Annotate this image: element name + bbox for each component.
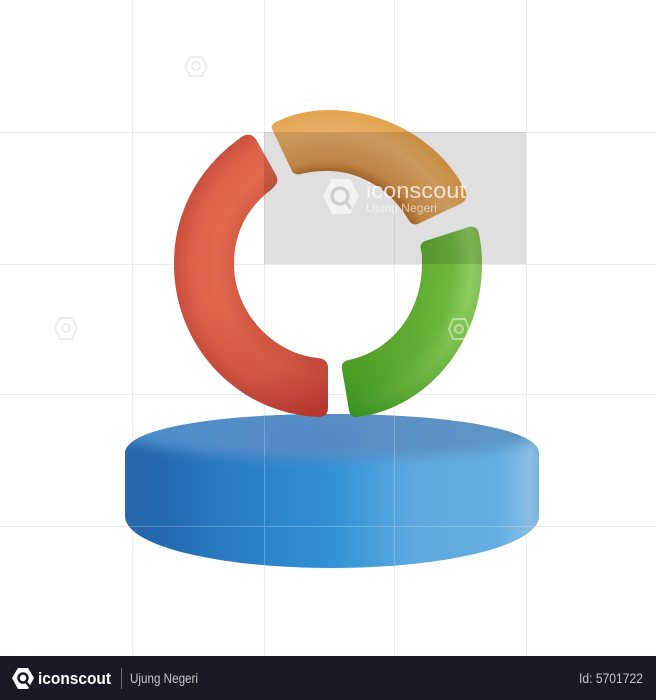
footer bar (0, 656, 656, 700)
watermark: small logo left (55, 318, 77, 339)
watermark: center logo and text: Ujung Negeri (366, 201, 437, 215)
watermark: center logo and text: iconscout (366, 178, 466, 203)
donut chart: three ring segments (174, 110, 482, 417)
footer author name: Ujung Negeri (130, 671, 198, 686)
watermark: small logo right (449, 319, 469, 339)
footer asset id: Id: 5701722 (579, 671, 643, 686)
segment: red (174, 135, 328, 417)
footer brand name: iconscout (38, 669, 111, 688)
footer separator (121, 668, 122, 689)
platform: blue cylinder (125, 414, 539, 568)
watermark panel: translucent gray rectangle (264, 132, 526, 264)
watermark: small logo top left (185, 57, 207, 76)
segment: green (342, 227, 482, 417)
watermark: center logo and text (323, 178, 466, 215)
icon: iconscout logo (12, 668, 34, 689)
segment: orange (272, 110, 466, 224)
